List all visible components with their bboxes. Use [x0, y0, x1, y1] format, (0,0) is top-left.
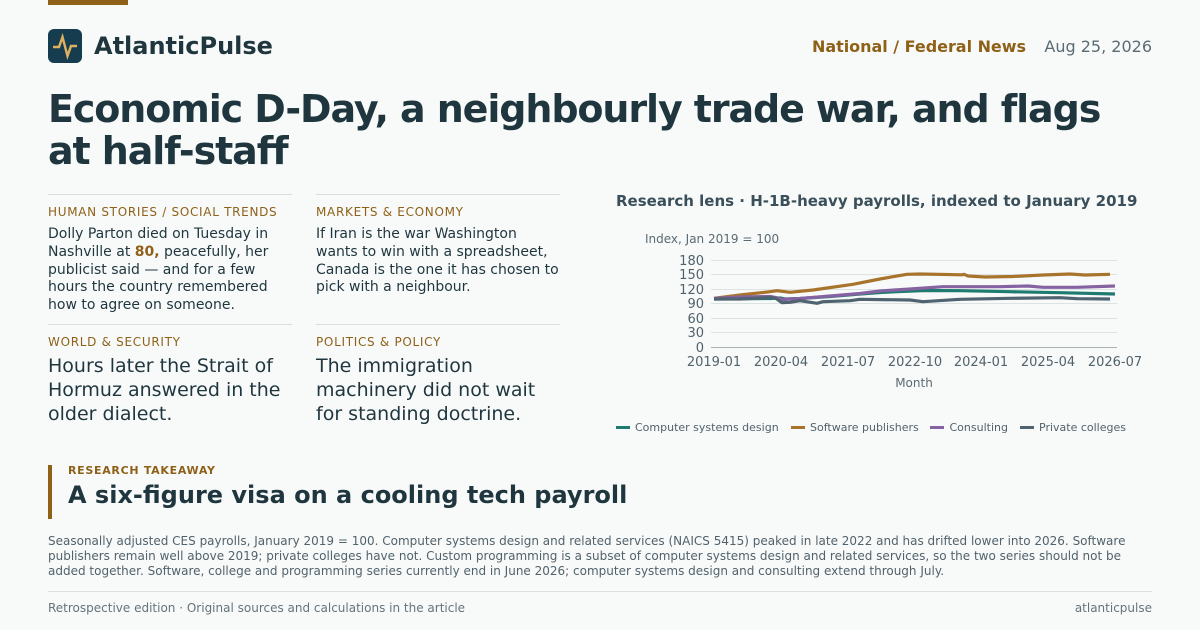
methodology note: Seasonally adjusted CES payrolls, January 2019 = 100. Computer systems design and related services (NAICS 5415) peaked in late 2022 and has drifted lower into 2026. Software [48, 534, 1125, 548]
text: human stories: Dolly Parton died on Tuesday in [48, 226, 268, 242]
methodology note [48, 534, 1125, 578]
heading: human stories: HUMAN STORIES / SOCIAL TRENDS [48, 205, 277, 219]
icon: pulse logo [48, 29, 82, 63]
text: markets: Canada is the one it has chosen to [316, 262, 559, 278]
line chart: 180 [679, 254, 704, 269]
line chart: Software publishers [810, 421, 919, 434]
panel: politics [316, 324, 560, 425]
text: human stories: hours the country remembered [48, 279, 268, 295]
text: human stories: Nashville at 80, peacefully, her [48, 244, 268, 260]
text: markets: pick with a neighbour. [316, 279, 471, 295]
takeaway label: RESEARCH TAKEAWAY [68, 464, 216, 477]
chart heading: Research lens · H-1B-heavy payrolls, indexed to January 2019 [616, 192, 1137, 210]
date: Aug 25, 2026 [1044, 37, 1152, 56]
line chart: 2026-07 [1088, 355, 1142, 370]
text: politics: machinery did not wait [316, 379, 535, 401]
section label: National / Federal News [812, 37, 1026, 56]
line chart: 60 [687, 312, 704, 327]
text: world: older dialect. [48, 403, 172, 425]
line chart: Month [895, 376, 933, 390]
panel: human stories [48, 194, 292, 313]
panel: world [48, 324, 292, 425]
footer right: atlanticpulse [1075, 601, 1152, 615]
text: human stories: publicist said — and for a few [48, 262, 255, 278]
title: at half-staff [48, 129, 288, 173]
methodology note: added together. Software, college and programming series currently end in June 2026; computer systems design and consulting extend through July. [48, 564, 944, 578]
heading: politics: POLITICS & POLICY [316, 335, 441, 349]
line chart: 30 [687, 326, 704, 341]
heading: markets: MARKETS & ECONOMY [316, 205, 464, 219]
line chart: 0 [696, 341, 704, 356]
line chart: 2021-07 [821, 355, 875, 370]
line chart: Index, Jan 2019 = 100 [645, 232, 779, 246]
panel: markets [316, 194, 560, 295]
title [48, 87, 1100, 173]
text: markets: If Iran is the war Washington [316, 226, 517, 242]
heading: world: WORLD & SECURITY [48, 335, 181, 349]
line chart: 2024-01 [954, 355, 1008, 370]
text: human stories: how to agree on someone. [48, 297, 235, 313]
text: politics [316, 355, 535, 425]
line chart: Private colleges [1039, 421, 1126, 434]
text: world: Hours later the Strait of [48, 355, 273, 377]
line chart: 2019-01 [687, 355, 741, 370]
line chart: 150 [679, 268, 704, 283]
methodology note: publishers remain well above 2019; private colleges have not. Custom programming is a subset of computer systems design and related services, so the two series should not be [48, 549, 1121, 563]
takeaway headline: A six-figure visa on a cooling tech payroll [68, 481, 627, 509]
text: politics: The immigration [316, 355, 473, 377]
footer left: Retrospective edition · Original sources and calculations in the article [48, 601, 465, 615]
line chart: 2025-04 [1021, 355, 1075, 370]
text: markets: wants to win with a spreadsheet, [316, 244, 548, 260]
line chart: 90 [687, 297, 704, 312]
callout: research takeaway [48, 464, 627, 519]
brand name: AtlanticPulse [94, 32, 273, 60]
line chart: Consulting [950, 421, 1008, 434]
line chart: Computer systems design [635, 421, 779, 434]
line chart: 2020-04 [754, 355, 808, 370]
top accent bar [48, 0, 128, 5]
line chart: 120 [679, 283, 704, 298]
line chart: 2022-10 [888, 355, 942, 370]
title: Economic D-Day, a neighbourly trade war, and flags [48, 87, 1100, 131]
text: world [48, 355, 280, 425]
text: politics: for standing doctrine. [316, 403, 521, 425]
line chart [616, 232, 1142, 434]
text: human stories [48, 226, 268, 313]
text: world: Hormuz answered in the [48, 379, 280, 401]
text: markets [316, 226, 559, 295]
